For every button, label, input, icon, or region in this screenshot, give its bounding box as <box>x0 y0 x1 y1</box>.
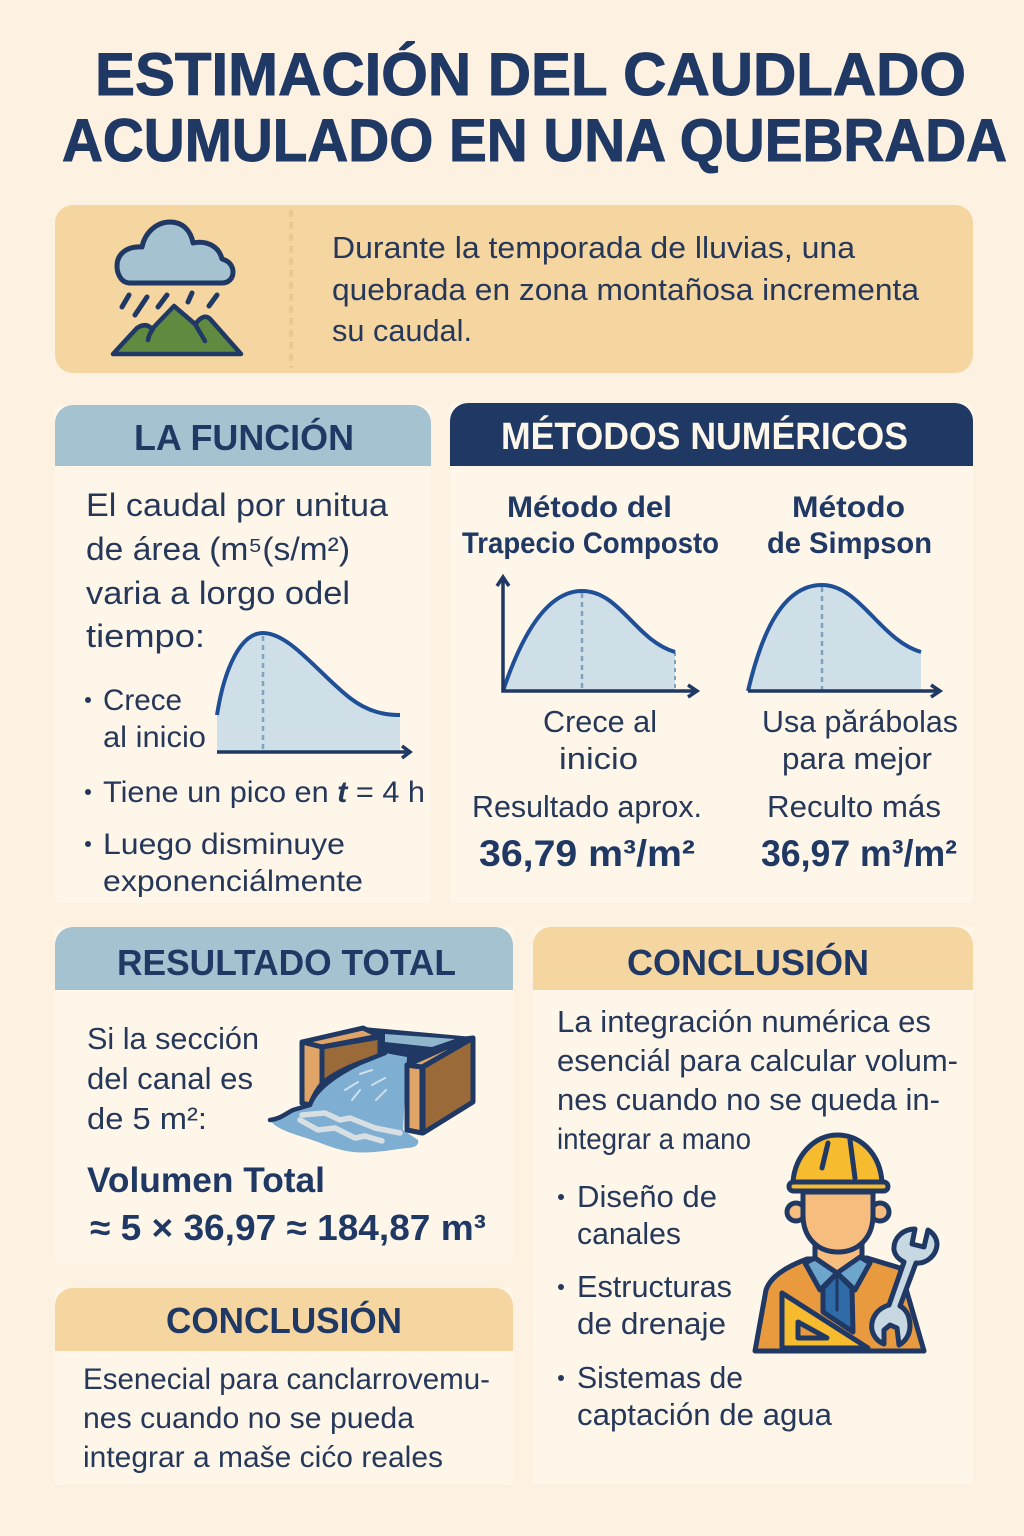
section text: de 5 m²: <box>87 1101 207 1136</box>
function bullets: al inicio <box>103 721 206 754</box>
method: simpson: de Simpson <box>767 527 932 560</box>
conclusion text: nes cuando no se pueda <box>83 1402 414 1435</box>
panel: conclusión izquierda <box>55 1288 513 1485</box>
section text <box>87 1021 259 1136</box>
method: simpson: 36,97 m³/m² <box>761 833 957 874</box>
function description: tiempo: <box>86 618 205 654</box>
intro text: su caudal. <box>332 313 472 348</box>
function bullets: Tiene un pico en t = 4 h <box>103 776 425 809</box>
panel: conclusión derecha <box>533 927 973 1485</box>
panel: la función: LA FUNCIÓN <box>134 416 354 458</box>
conclusion paragraph: nes cuando no se queda in- <box>557 1082 940 1117</box>
method: simpson: para mejor <box>782 741 932 776</box>
total volume: ≈ 5 × 36,97 ≈ 184,87 m³ <box>90 1207 486 1248</box>
method: trapecio compuesto: Resultado aprox. <box>472 789 702 824</box>
conclusion text: Esenecial para canclarrovemu- <box>83 1363 490 1396</box>
icon: rain cloud over mountains <box>113 222 241 354</box>
icon: engineer with helmet and wrench <box>755 1135 937 1351</box>
chart: flow curve <box>217 633 410 758</box>
function bullets <box>85 684 425 898</box>
function description: varia a lorgo odel <box>86 575 350 611</box>
function bullets: exponenciálmente <box>103 865 363 898</box>
method: trapecio compuesto: inicio <box>559 741 638 776</box>
title: ESTIMACIÓN DEL CAUDLADO <box>95 41 966 108</box>
method: simpson: Reculto más <box>767 789 941 824</box>
icon: channel with water <box>270 1028 473 1153</box>
total volume: Volumen Total <box>87 1161 325 1200</box>
applications list <box>558 1179 833 1432</box>
applications list: Sistemas de <box>577 1360 743 1395</box>
title <box>62 41 1007 174</box>
applications list: Estructuras <box>577 1269 732 1304</box>
panel: conclusión derecha: CONCLUSIÓN <box>627 941 869 983</box>
function description <box>86 487 388 654</box>
conclusion paragraph: integrar a mano <box>557 1123 751 1156</box>
intro text <box>332 230 920 348</box>
panel: conclusión izquierda: CONCLUSIÓN <box>166 1299 402 1341</box>
panel: métodos numéricos <box>450 403 973 903</box>
conclusion paragraph: La integración numérica es <box>557 1004 931 1039</box>
method: trapecio compuesto: Trapecio Composto <box>462 527 719 560</box>
panel: resultado total: RESULTADO TOTAL <box>117 942 456 983</box>
applications list: canales <box>577 1216 681 1251</box>
section text: del canal es <box>87 1061 253 1096</box>
section text: Si la sección <box>87 1021 259 1056</box>
chart: trapezoid <box>497 577 697 697</box>
conclusion text: integrar a maše cićo reales <box>83 1441 443 1474</box>
panel: resultado total <box>55 927 513 1264</box>
method: trapecio compuesto <box>462 491 719 874</box>
method: trapecio compuesto: Crece al <box>543 704 657 739</box>
method: simpson: Usa părábolas <box>762 704 958 739</box>
intro text: quebrada en zona montañosa incrementa <box>332 272 920 307</box>
intro text: Durante la temporada de lluvias, una <box>332 230 856 265</box>
method: trapecio compuesto: Método del <box>507 491 672 524</box>
chart: simpson <box>748 585 940 697</box>
function description: de área (m⁵(s/m²) <box>86 531 350 567</box>
applications list: captación de agua <box>577 1397 833 1432</box>
function description: El caudal por unitua <box>86 487 388 523</box>
total volume <box>87 1161 486 1248</box>
panel: introduction <box>55 205 973 373</box>
method: trapecio compuesto: 36,79 m³/m² <box>479 833 695 874</box>
conclusion paragraph <box>557 1004 958 1156</box>
panel: la función <box>55 405 431 903</box>
function bullets: Crece <box>103 684 182 717</box>
conclusion text <box>83 1363 490 1474</box>
panel: métodos numéricos: MÉTODOS NUMÉRICOS <box>501 414 908 458</box>
applications list: Diseño de <box>577 1179 717 1214</box>
function bullets: Luego disminuye <box>103 828 345 861</box>
method: simpson <box>748 491 958 874</box>
applications list: de drenaje <box>577 1306 726 1341</box>
method: simpson: Método <box>792 491 905 524</box>
conclusion paragraph: esenciál para calcular volum- <box>557 1043 958 1078</box>
